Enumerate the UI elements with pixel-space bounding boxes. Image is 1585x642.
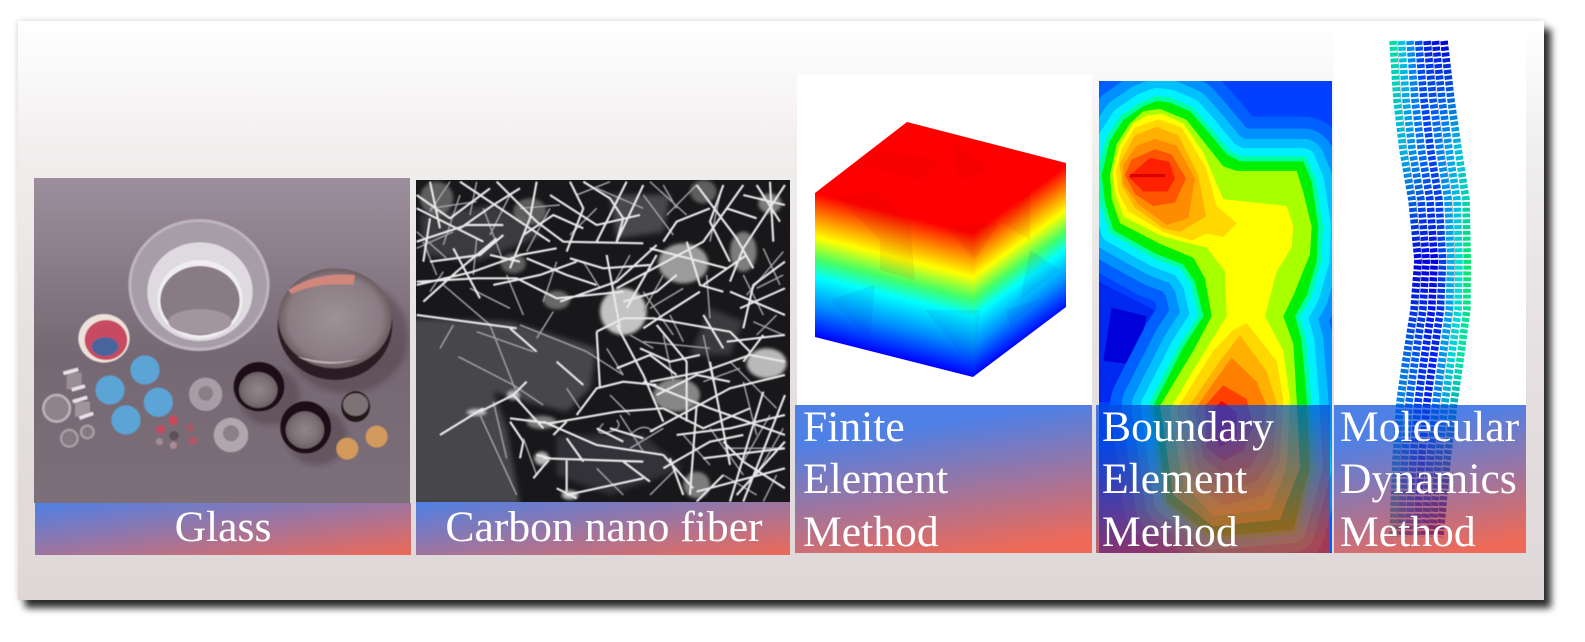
- upper hill: [1116, 119, 1237, 240]
- bright fibers: [417, 182, 785, 502]
- caption: Molecular Dynamics Method: [1334, 403, 1526, 556]
- contour bands: [1102, 101, 1318, 537]
- caption: Finite Element Method: Element: [803, 455, 948, 503]
- low-value pit: [1099, 282, 1160, 402]
- caption: Boundary Element Method: Method: [1102, 508, 1238, 556]
- caption: Glass: [35, 503, 411, 555]
- caption: Boundary Element Method: Element: [1102, 455, 1247, 503]
- icon: tiny red lenses: [156, 416, 197, 449]
- panel: molecular dynamics white backing: [1334, 30, 1526, 553]
- shadows under lenses: [240, 280, 408, 465]
- panel: finite element white backing: [797, 74, 1092, 405]
- icon: small red and blue lens: [78, 314, 130, 363]
- photo: glass lenses: [34, 178, 410, 503]
- icon: blue glass discs: [95, 355, 173, 435]
- icon: tiny clear optics: [43, 369, 94, 447]
- caption: Boundary Element Method: [1096, 403, 1330, 556]
- fiber clusters: [420, 180, 787, 500]
- thin fibers: [417, 182, 783, 502]
- chart: molecular dynamics nanotube: [1393, 41, 1467, 537]
- caption: Molecular Dynamics Method: Molecular: [1340, 403, 1520, 451]
- chart: finite element cube: [815, 122, 1066, 377]
- lower hill: [1177, 323, 1283, 506]
- caption: Molecular Dynamics Method: Method: [1340, 508, 1476, 556]
- caption: Finite Element Method: Finite: [803, 403, 905, 451]
- icon: orange discs: [336, 426, 388, 460]
- caption: Finite Element Method: Method: [803, 508, 939, 556]
- mesh facets: [838, 140, 1030, 280]
- background tones: [410, 195, 743, 505]
- caption: Glass: Glass: [175, 503, 271, 551]
- photo: carbon nano fiber micrograph: [410, 180, 790, 505]
- icon: clear stepped lenses: [189, 378, 248, 452]
- icon: large clear bowl lens: [128, 219, 270, 351]
- caption: Carbon nano fiber: Carbon nano fiber: [445, 503, 763, 551]
- icon: large dark lens: [278, 268, 392, 380]
- caption: Boundary Element Method: Boundary: [1102, 403, 1274, 451]
- caption: Molecular Dynamics Method: Dynamics: [1340, 455, 1517, 503]
- caption: Finite Element Method: [795, 403, 1092, 556]
- chart: boundary element contour map: [1099, 81, 1332, 553]
- icon: dark ring lenses: [234, 362, 370, 453]
